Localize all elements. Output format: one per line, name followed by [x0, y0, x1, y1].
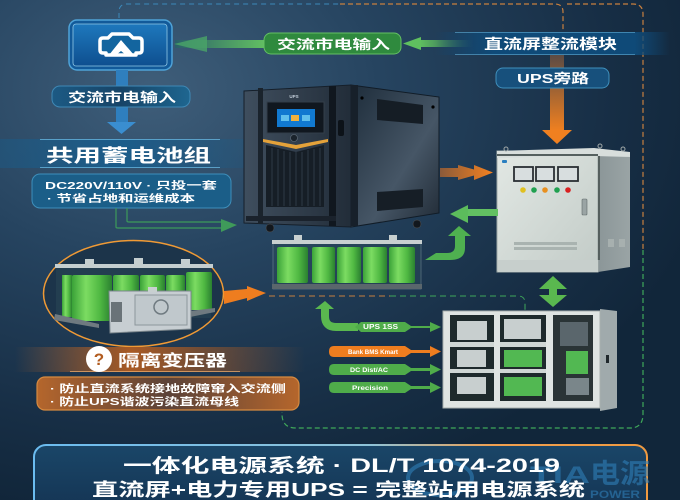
text box: transformer benefits	[37, 377, 299, 410]
heading: DC rectifier module	[435, 32, 670, 55]
legend arrow: battery: Bank BMS Kmart	[348, 350, 398, 356]
legend arrow: UPS	[355, 322, 441, 332]
text box: transformer benefits: · 防止UPS谐波污染直流母线	[50, 395, 240, 408]
legend arrow: protection	[329, 382, 441, 393]
footer panel	[34, 445, 650, 500]
text box: DC voltage: DC220V/110V · 只投一套	[45, 179, 217, 192]
text box: transformer benefits: · 防止直流系统接地故障窜入交流侧	[50, 382, 286, 395]
arrow: DC panel to UPS	[450, 205, 498, 223]
dashed green outer line	[282, 250, 643, 428]
battery and transformer circle	[44, 240, 224, 346]
battery bank center	[272, 235, 422, 289]
dashed middle bus line	[269, 295, 390, 297]
legend arrow: UPS: UPS 1SS	[363, 324, 398, 331]
arrow: UPS branch to battery	[315, 301, 358, 327]
footer panel: 直流屏+电力专用UPS = 完整站用电源系统	[92, 479, 585, 500]
legend arrow: protection: Precision	[352, 386, 388, 392]
watermark: 电源	[590, 459, 650, 489]
DC panel cabinet	[497, 144, 630, 272]
arrow: UPS bypass orange	[542, 54, 572, 144]
integrated power cabinet	[443, 309, 617, 411]
heading: isolation transformer: ?	[94, 350, 104, 369]
heading: shared battery bank: 共用蓄电池组	[46, 146, 211, 166]
arrow: UPS to DC panel	[440, 165, 493, 180]
watermark: TIA	[530, 462, 590, 489]
arrow: AC input down	[107, 70, 136, 134]
UPS cabinet: UPS	[289, 94, 299, 99]
label: UPS bypass	[496, 68, 609, 88]
label: AC mains green	[264, 33, 401, 54]
label: UPS bypass: UPS旁路	[517, 71, 589, 86]
icon: AC input box	[69, 20, 172, 70]
arrow: battery feed to UPS	[116, 208, 237, 232]
heading: DC rectifier module: 直流屏整流模块	[484, 36, 617, 52]
dashed green bus line	[390, 296, 525, 310]
legend arrow: DC	[329, 364, 441, 375]
arrow: AC input green to icon box	[174, 36, 265, 52]
UPS cabinet	[244, 85, 439, 232]
footer panel: 一体化电源系统 · DL/T 1074-2019	[123, 454, 560, 477]
heading: isolation transformer: 隔离变压器	[118, 351, 227, 370]
label: AC mains green: 交流市电输入	[277, 37, 390, 52]
legend arrow: battery	[329, 346, 441, 357]
arrow: transformer to battery	[224, 286, 266, 304]
dashed orange feedback line	[340, 4, 643, 250]
arrow: rectifier to AC	[403, 37, 473, 50]
text box: DC voltage	[32, 174, 231, 208]
label: AC mains input	[52, 86, 190, 107]
legend arrow: DC: DC Dist/AC	[350, 368, 389, 374]
text box: DC voltage: · 节省占地和运维成本	[47, 192, 195, 205]
heading: isolation transformer	[15, 346, 305, 372]
dashed blue feedback line	[119, 4, 340, 18]
label: AC mains input: 交流市电输入	[68, 90, 176, 105]
heading: shared battery bank	[0, 139, 245, 168]
arrow: double vertical	[539, 276, 567, 307]
arrow: battery up green	[425, 226, 471, 260]
watermark	[408, 459, 650, 500]
